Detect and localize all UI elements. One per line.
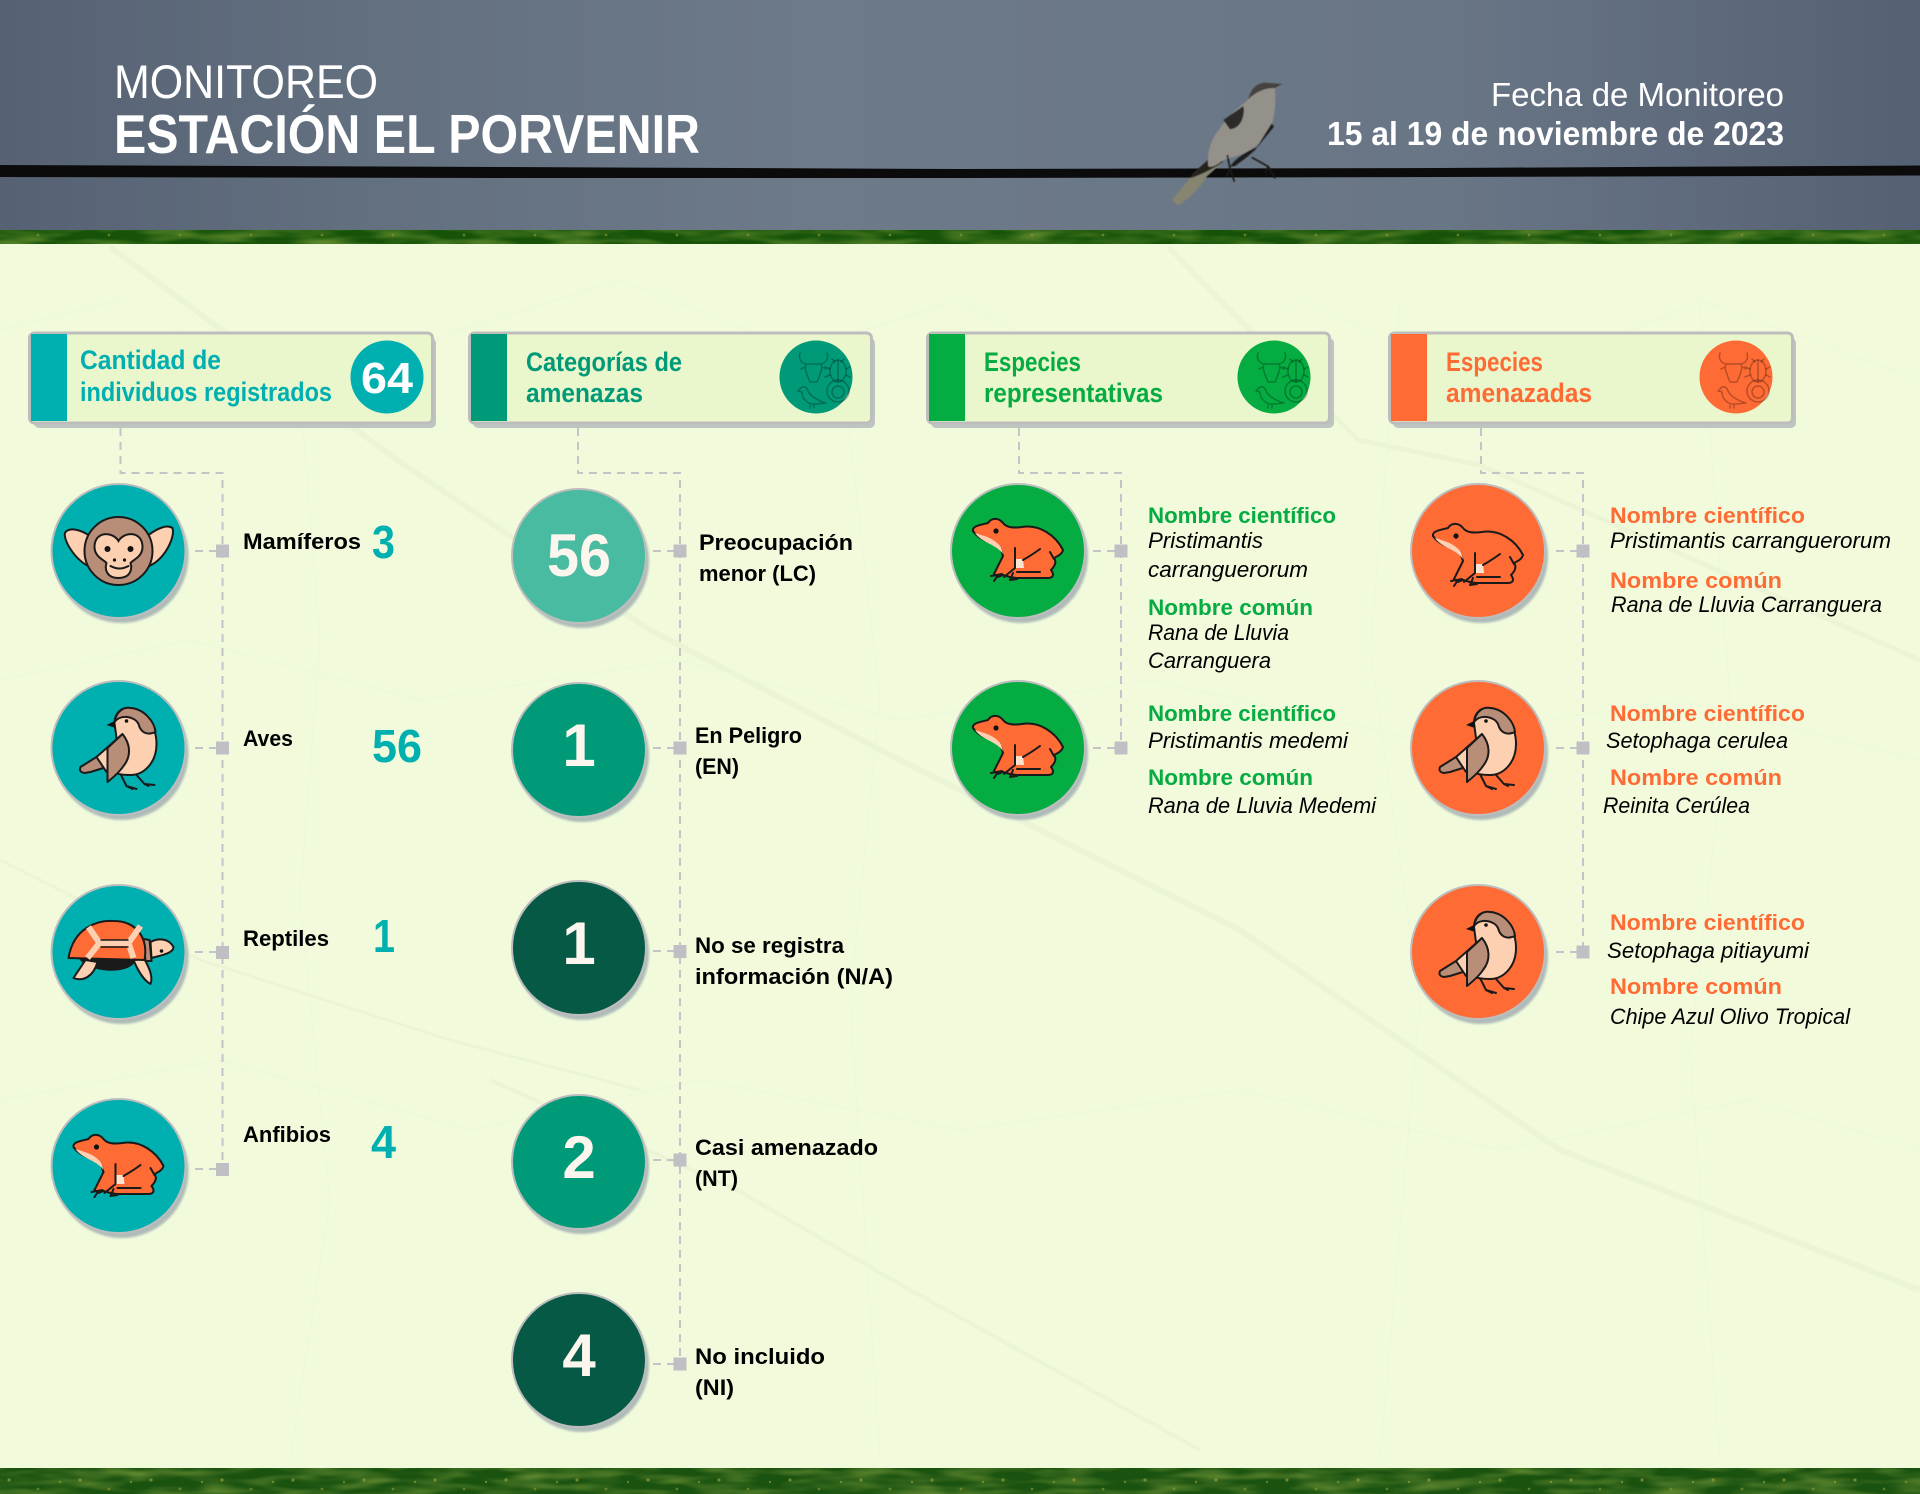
N/A label: información (N/A): [695, 964, 893, 989]
header card: amenazadas: amenazadas: [1446, 378, 1592, 408]
frog icon: medemi: [951, 681, 1088, 820]
species text: pitiayumi: Setophaga pitiayumi: [1607, 938, 1810, 963]
title: ESTACIÓN EL PORVENIR: [114, 103, 700, 165]
species text: medemi: Pristimantis medemi: [1148, 728, 1349, 753]
aves count: 56: [372, 720, 422, 772]
title: MONITOREO: [114, 55, 378, 108]
NI label: [695, 1344, 825, 1400]
NT label: Casi amenazado: [695, 1135, 878, 1160]
header card: amenazadas: Especies: [1446, 347, 1543, 377]
NT label: [695, 1135, 878, 1191]
EN count circle: [512, 683, 649, 822]
mamíferos count: 3: [372, 516, 395, 568]
header card: cantidad: [30, 333, 436, 428]
wire: [0, 165, 1920, 178]
NT count circle: 2: [562, 1124, 596, 1191]
species text: carranguerorum: carranguerorum: [1148, 557, 1308, 582]
monitoring date: 15 al 19 de noviembre de 2023: [1327, 115, 1784, 152]
EN count circle: 1: [562, 712, 596, 779]
header card: categorías: amenazas: [526, 378, 643, 408]
LC label: [699, 530, 853, 586]
species text: cerulea: Setophaga cerulea: [1606, 728, 1788, 753]
NT count circle: [512, 1095, 649, 1234]
header card: categorías: [470, 333, 875, 428]
frog icon: carranguerorum: [951, 484, 1088, 623]
NT label: (NT): [695, 1166, 738, 1191]
reptiles label: Reptiles: [243, 926, 329, 951]
header card: amenazadas: [1390, 333, 1796, 428]
bird icon: pitiayumi: [1411, 885, 1548, 1024]
reptiles count: 1: [373, 910, 395, 962]
species text: pitiayumi: Chipe Azul Olivo Tropical: [1610, 1004, 1851, 1029]
EN label: En Peligro: [695, 723, 802, 748]
connector: categorías: [578, 428, 686, 1370]
species text: pitiayumi: Nombre científico: [1610, 910, 1805, 935]
panel: categorías de amenazas: [470, 333, 893, 1432]
NI count circle: [512, 1293, 649, 1432]
NI label: (NI): [695, 1375, 734, 1400]
NI count circle: 4: [562, 1322, 596, 1389]
panel: especies amenazadas: [1390, 333, 1891, 1029]
species text: medemi: Rana de Lluvia Medemi: [1148, 793, 1377, 818]
header card: cantidad: 64: [361, 354, 414, 403]
monitoring date: [1327, 76, 1784, 152]
species text: medemi: Nombre científico: [1148, 701, 1336, 726]
species text: cerulea: Nombre común: [1610, 765, 1782, 790]
species text: carranguerorum amenazada: [1610, 503, 1891, 617]
species text: carranguerorum: Rana de Lluvia: [1148, 620, 1289, 645]
species text: carranguerorum amenazada: Nombre científico: [1610, 503, 1805, 528]
aves icon: [52, 681, 188, 820]
species text: cerulea: Reinita Cerúlea: [1603, 793, 1750, 818]
species text: carranguerorum amenazada: Rana de Lluvia Carranguera: [1611, 592, 1882, 617]
species text: carranguerorum: Carranguera: [1148, 648, 1271, 673]
LC count circle: 56: [547, 522, 611, 589]
bird icon: cerulea: [1411, 681, 1548, 820]
NI label: No incluido: [695, 1344, 825, 1369]
header sky: [0, 0, 1920, 231]
header card: cantidad: Cantidad de: [80, 345, 221, 375]
N/A label: No se registra: [695, 933, 845, 958]
LC label: Preocupación: [699, 530, 853, 555]
anfibios icon: [52, 1099, 188, 1238]
frog icon: amenazada: [1411, 484, 1548, 623]
species text: cerulea: [1603, 701, 1805, 818]
connector: cantidad: [120, 428, 229, 1176]
connector: amenazadas: [1481, 428, 1590, 958]
header card: cantidad: individuos registrados: [80, 377, 332, 407]
mamíferos label: Mamíferos: [243, 529, 361, 554]
EN label: [695, 723, 802, 779]
species text: carranguerorum: Nombre común: [1148, 595, 1313, 620]
species text: medemi: Nombre común: [1148, 765, 1313, 790]
aves label: Aves: [243, 726, 293, 751]
species text: pitiayumi: [1607, 910, 1851, 1029]
green leaf band bottom: [0, 1468, 1920, 1494]
green leaf band top: [0, 230, 1920, 244]
LC count circle: [512, 489, 649, 628]
species text: carranguerorum: Nombre científico: [1148, 503, 1336, 528]
N/A count circle: 1: [562, 910, 596, 977]
LC label: menor (LC): [699, 561, 816, 586]
EN label: (EN): [695, 754, 739, 779]
N/A count circle: [512, 881, 649, 1020]
species text: carranguerorum amenazada: Pristimantis carranguerorum: [1610, 528, 1891, 553]
reptiles icon: [52, 885, 188, 1024]
header card: categorías: Categorías de: [526, 347, 682, 377]
panel: especies representativas: [928, 333, 1377, 820]
species text: pitiayumi: Nombre común: [1610, 974, 1782, 999]
panel: cantidad de individuos: [30, 333, 436, 1238]
species text: carranguerorum amenazada: Nombre común: [1610, 568, 1782, 593]
connector: representativas: [1019, 428, 1128, 754]
species text: carranguerorum: [1148, 503, 1336, 673]
header card: representativas: Especies: [984, 347, 1081, 377]
N/A label: [695, 933, 893, 989]
title: [114, 55, 700, 165]
header card: representativas: representativas: [984, 378, 1163, 408]
mamíferos icon: [52, 484, 188, 623]
bird photo: [1172, 83, 1283, 205]
species text: carranguerorum: Pristimantis: [1148, 528, 1263, 553]
header card: representativas: [928, 333, 1334, 428]
monitoring date: Fecha de Monitoreo: [1491, 76, 1784, 113]
anfibios label: Anfibios: [243, 1122, 331, 1147]
species text: cerulea: Nombre científico: [1610, 701, 1805, 726]
species text: medemi: [1148, 701, 1377, 818]
anfibios count: 4: [371, 1116, 396, 1168]
